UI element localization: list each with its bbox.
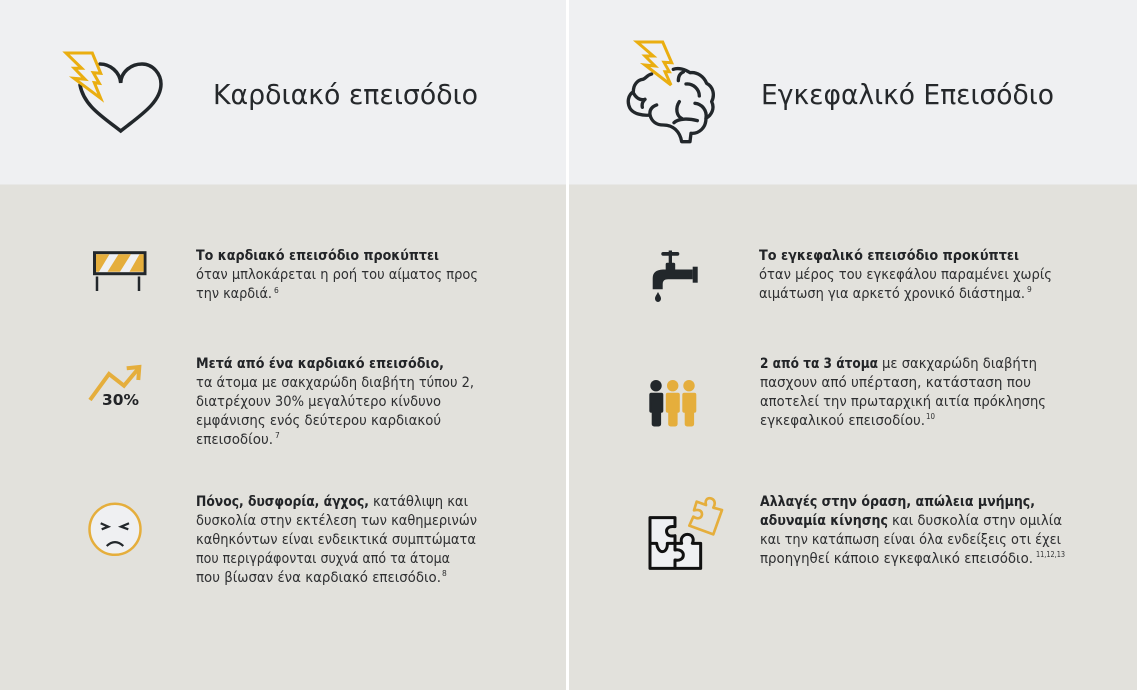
text: stroke symptoms: και την κατάπωση είναι όλα ενδείξεις οτι έχει: [760, 532, 1061, 548]
text: heart attack cause: όταν μπλοκάρεται η ροή του αίματος προς: [196, 267, 478, 283]
text: heart attack risk: 7: [275, 431, 280, 440]
icon: distressed face: [90, 504, 140, 555]
text: stroke hypertension: 10: [926, 412, 935, 421]
text: stroke cause: Το εγκεφαλικό επεισόδιο προκύπτει: [759, 248, 1019, 264]
icon: rising arrow 30%: [90, 367, 139, 409]
icon: rising arrow 30%: 30%: [102, 391, 139, 409]
text: heart attack risk: τα άτομα με σακχαρώδη διαβήτη τύπου 2,: [196, 375, 474, 391]
text: heart attack symptoms: κατάθλιψη και: [373, 494, 468, 510]
text: stroke symptoms: αδυναμία κίνησης: [760, 513, 888, 529]
icon: brain with lightning bolt: [628, 42, 713, 142]
text: heart attack symptoms: που βίωσαν ένα καρδιακό επεισόδιο.: [196, 570, 441, 586]
text: stroke symptoms: Αλλαγές στην όραση, απώλεια μνήμης,: [760, 494, 1035, 510]
text: stroke cause: [759, 248, 1052, 302]
icon: heart with lightning bolt: [66, 53, 161, 131]
icon: road barrier: [94, 253, 145, 291]
text: heart attack cause: Το καρδιακό επεισόδιο προκύπτει: [196, 248, 439, 264]
text: stroke cause: όταν μέρος του εγκεφάλου παραμένει χωρίς: [759, 267, 1052, 283]
text: heart attack symptoms: 8: [442, 569, 447, 578]
text: stroke hypertension: αποτελεί την πρωταρχική αιτία πρόκλησης: [760, 394, 1046, 410]
text: heart attack cause: 6: [274, 286, 279, 295]
icon: three people: [649, 380, 696, 426]
text: heart attack cause: την καρδιά.: [196, 286, 272, 302]
icon: dripping faucet: [653, 250, 698, 302]
text: heart attack risk: επεισοδίου.: [196, 432, 273, 448]
text: heart attack risk: εμφάνισης ενός δεύτερου καρδιακού: [196, 413, 441, 429]
text: heart attack symptoms: που περιγράφονται συχνά από τα άτομα: [196, 551, 450, 567]
text: heart attack risk: Μετά από ένα καρδιακό επεισόδιο,: [196, 356, 444, 372]
text: heart attack symptoms: καθηκόντων είναι ενδεικτικά συμπτώματα: [196, 532, 476, 548]
text: stroke symptoms: και δυσκολία στην ομιλία: [892, 513, 1062, 529]
text: stroke hypertension: [760, 356, 1046, 429]
text: heart attack symptoms: Πόνος, δυσφορία, άγχος,: [196, 494, 369, 510]
text: heart attack symptoms: [196, 494, 477, 586]
text: stroke hypertension: 2 από τα 3 άτομα: [760, 356, 878, 372]
text: stroke cause: αιμάτωση για αρκετό χρονικό διάστημα.: [759, 286, 1025, 302]
text: heart attack risk: διατρέχουν 30% μεγαλύτερο κίνδυνο: [196, 394, 441, 410]
text: heart attack risk: [196, 356, 474, 448]
text: heart attack symptoms: δυσκολία στην εκτέλεση των καθημερινών: [196, 513, 477, 529]
text: heart attack cause: [196, 248, 478, 302]
text: stroke hypertension: πασχουν από υπέρταση, κατάσταση που: [760, 375, 1031, 391]
text: stroke symptoms: [760, 494, 1065, 567]
text: stroke symptoms: προηγηθεί κάποιο εγκεφαλικό επεισόδιο.: [760, 551, 1033, 567]
text: stroke hypertension: με σακχαρώδη διαβήτη: [882, 356, 1037, 372]
text: stroke symptoms: 11,12,13: [1036, 550, 1065, 559]
text: stroke cause: 9: [1027, 285, 1032, 294]
text: stroke hypertension: εγκεφαλικού επεισοδίου.: [760, 413, 925, 429]
heading: stroke: Εγκεφαλικό Επεισόδιο: [761, 78, 1054, 111]
heading: heart attack: Καρδιακό επεισόδιο: [213, 78, 478, 111]
icon: puzzle pieces: [650, 498, 722, 568]
